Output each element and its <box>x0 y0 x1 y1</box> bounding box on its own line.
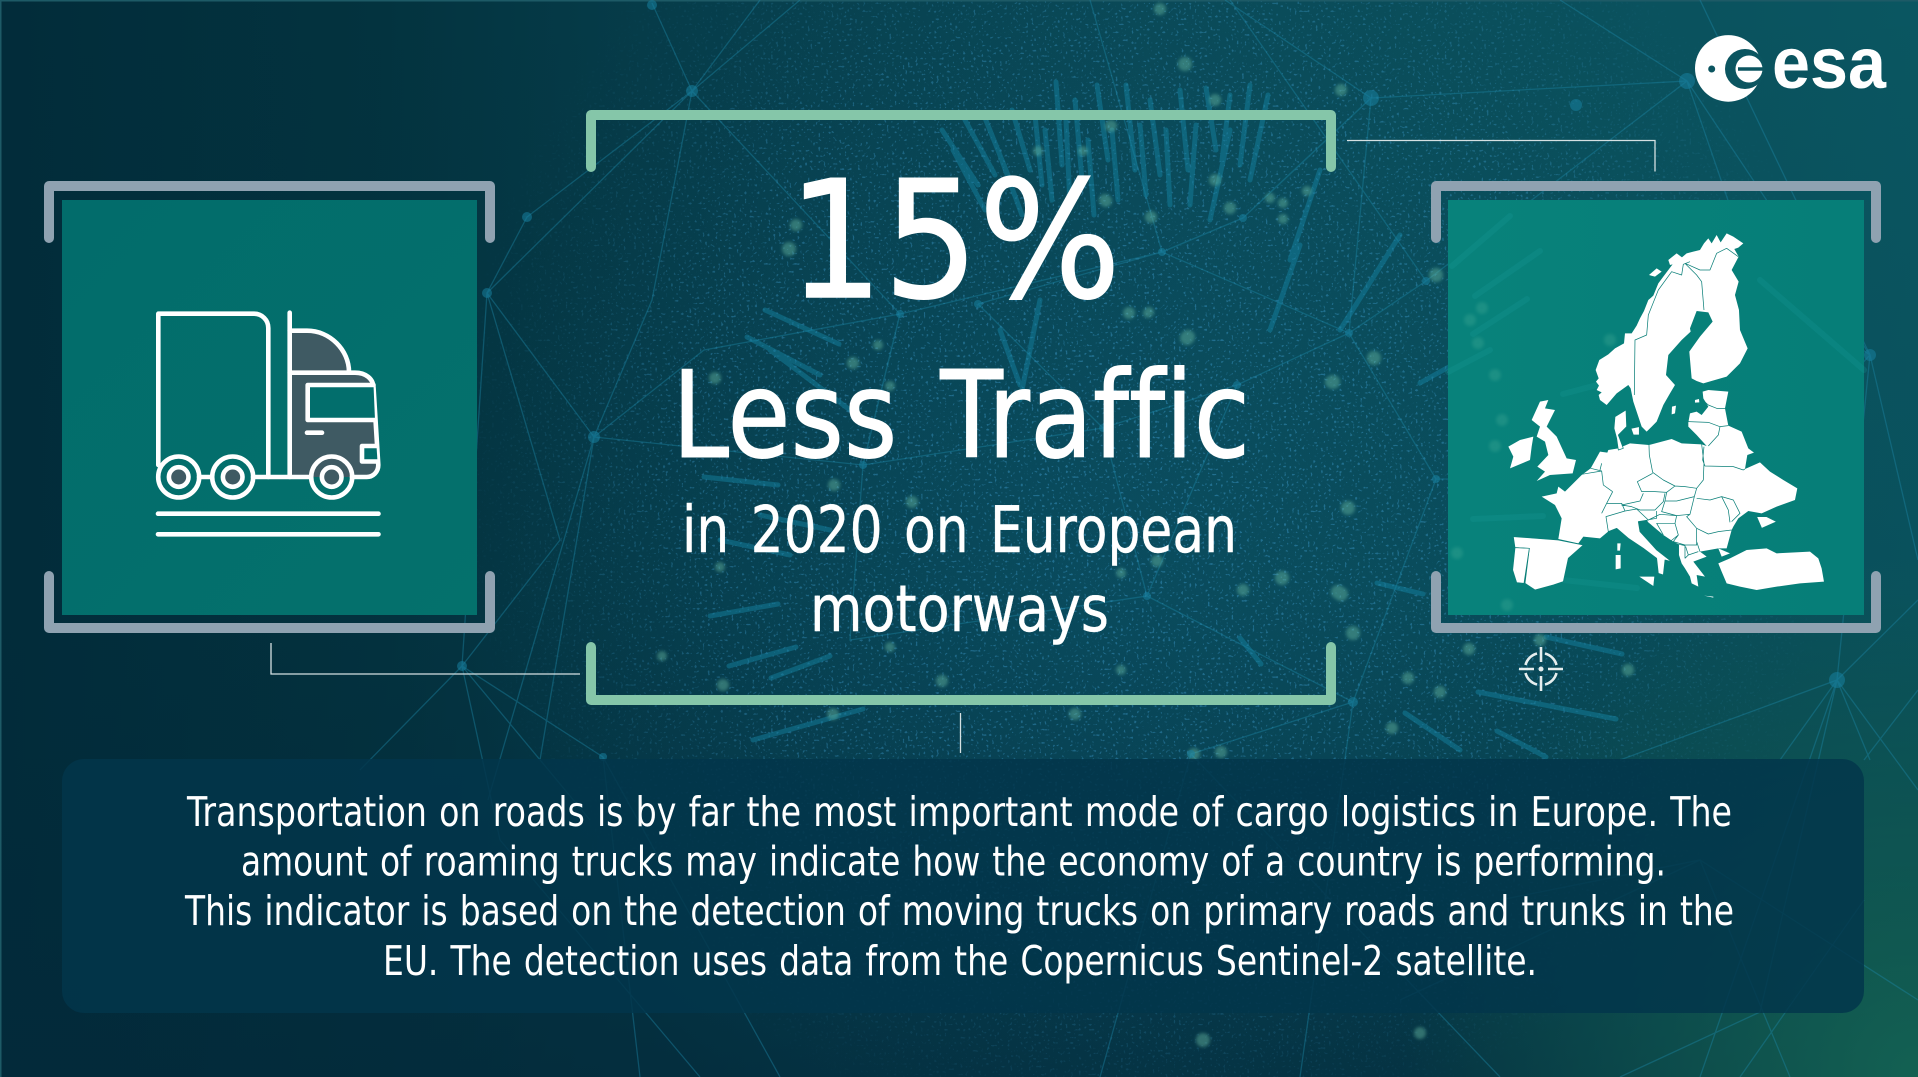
subheading line 1: in 2020 on European <box>682 494 1237 568</box>
frame: map <box>1436 186 1876 628</box>
connector: map to stat <box>1347 140 1655 172</box>
body text line 4: EU. The detection uses data from the Copernicus Sentinel-2 satellite. <box>383 937 1537 985</box>
panel: description <box>62 759 1864 1013</box>
icon: truck <box>158 313 378 534</box>
headline: Less Traffic: Less Traffic <box>672 347 1250 486</box>
frame: headline <box>591 115 1331 700</box>
logo: esa: esa <box>1772 24 1887 104</box>
connector: truck to stat <box>271 643 580 674</box>
panel: europe map <box>1436 186 1876 628</box>
frame: truck <box>49 186 490 628</box>
headline: 15%: 15% <box>788 147 1121 336</box>
connector: stat to text <box>960 713 962 753</box>
icon: map of Europe <box>1508 233 1824 598</box>
panel: truck <box>49 186 490 628</box>
icon: crosshair target <box>1519 647 1563 691</box>
subheading line 2: motorways <box>810 573 1109 647</box>
logo: esa <box>1695 24 1887 104</box>
